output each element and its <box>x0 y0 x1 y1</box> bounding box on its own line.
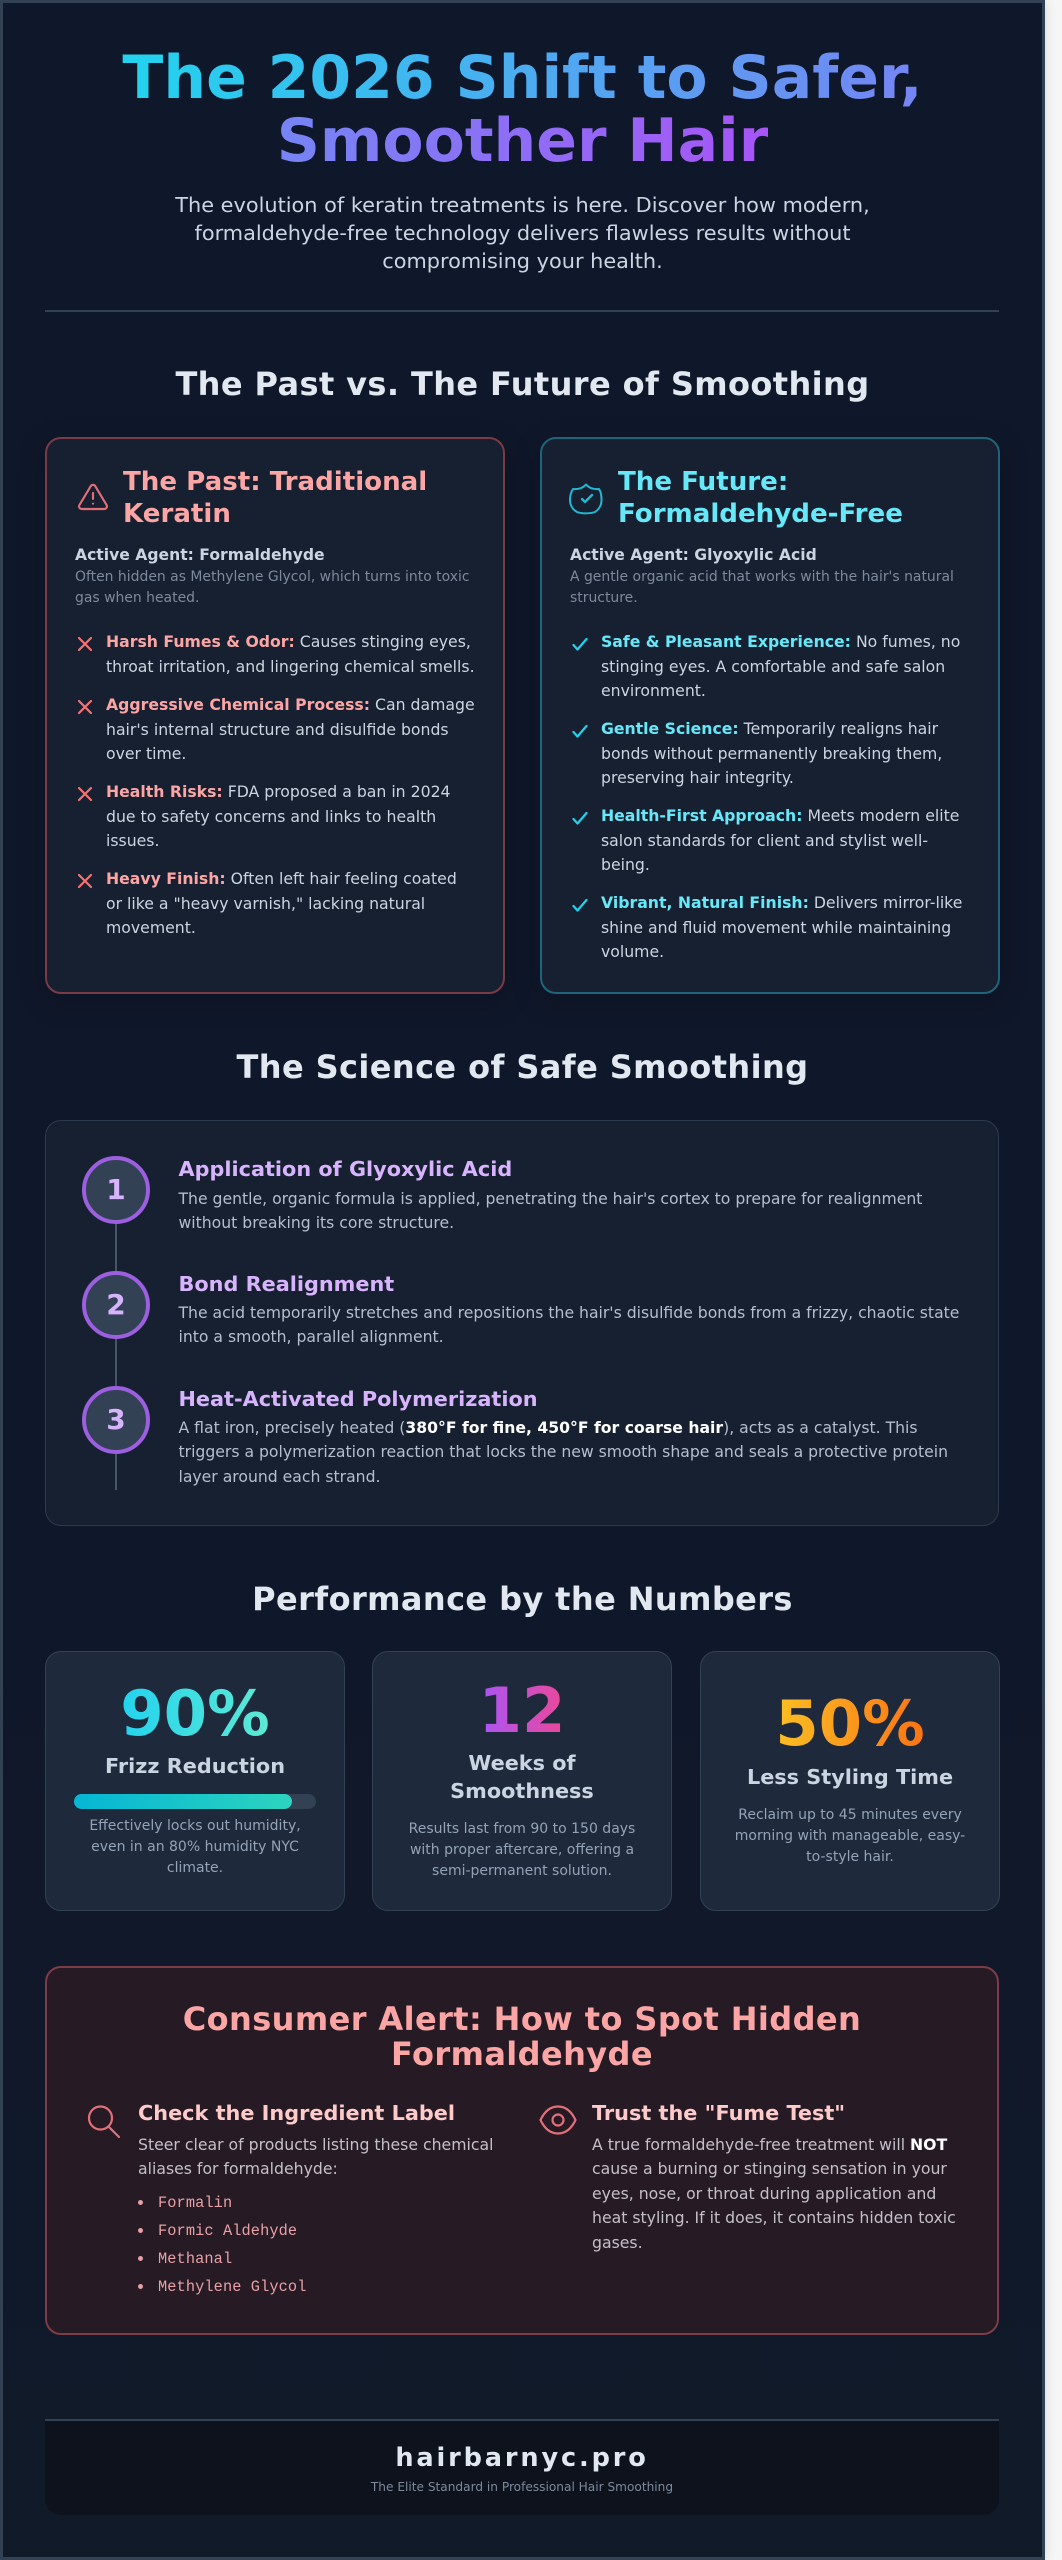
heavy finish item: movement. <box>106 918 196 937</box>
step 2 text: into a smooth, parallel alignment. <box>178 1327 444 1346</box>
heading: performance: Performance by the Numbers <box>252 1580 793 1618</box>
icon: cross 3 <box>78 786 92 802</box>
step 2 text <box>178 1303 959 1346</box>
left check title: Check the Ingredient Label <box>138 2101 455 2125</box>
stat description <box>409 1821 635 1879</box>
title <box>122 43 923 176</box>
stat card: less styling time <box>700 1651 1000 1911</box>
right check text: A true formaldehyde-free treatment will NOT <box>592 2135 947 2154</box>
stat description: Results last from 90 to 150 days <box>409 1821 635 1837</box>
step 3 title: Heat-Activated Polymerization <box>178 1387 538 1411</box>
agent description: gas when heated. <box>75 590 199 606</box>
stat description: to-style hair. <box>806 1849 894 1865</box>
stat value 12: 12 <box>478 1674 565 1747</box>
icon: check 4 <box>572 898 588 912</box>
health risks item: Health Risks: FDA proposed a ban in 2024 <box>106 782 451 801</box>
future heading <box>618 467 903 529</box>
health first item: salon standards for client and stylist well- <box>601 830 928 850</box>
health risks item <box>106 782 451 850</box>
footer <box>45 2419 999 2515</box>
future heading: The Future: <box>618 467 788 497</box>
stat label <box>450 1751 594 1803</box>
heavy finish item <box>106 869 457 937</box>
stat description: morning with manageable, easy- <box>735 1828 965 1844</box>
stat label: Less Styling Time <box>747 1765 953 1789</box>
progress bar <box>74 1794 316 1809</box>
stat description <box>89 1818 301 1876</box>
stat label: Smoothness <box>450 1779 594 1803</box>
health risks item: due to safety concerns and links to health <box>106 806 436 826</box>
harsh fumes item: Harsh Fumes & Odor: Causes stinging eyes, <box>106 632 471 651</box>
left check text: aliases for formaldehyde: <box>138 2159 338 2178</box>
left check text: Steer clear of products listing these chemical <box>138 2135 493 2154</box>
safe experience item: Safe & Pleasant Experience: No fumes, no <box>601 632 960 651</box>
agent description: A gentle organic acid that works with the hair's natural <box>570 569 954 585</box>
stat value 90%: 90% <box>120 1677 270 1750</box>
safe experience item: stinging eyes. A comfortable and safe salon <box>601 656 945 676</box>
past heading <box>123 467 427 529</box>
panel: the past <box>45 437 505 994</box>
harsh fumes item <box>106 632 475 676</box>
icon: shield check <box>569 484 602 514</box>
stat card: frizz reduction <box>45 1651 345 1911</box>
heavy finish item: Heavy Finish: Often left hair feeling coated <box>106 869 457 888</box>
alert heading: Consumer Alert: How to Spot Hidden <box>183 2000 861 2038</box>
agent description <box>570 569 954 606</box>
agent description: structure. <box>570 590 638 606</box>
panel: the future <box>540 437 1000 994</box>
icon: check 2 <box>572 724 588 738</box>
right check text <box>592 2135 956 2252</box>
stat description: Effectively locks out humidity, <box>89 1818 301 1834</box>
future heading: Formaldehyde-Free <box>618 499 903 529</box>
step 2 number: 2 <box>106 1288 126 1321</box>
stat label: Frizz Reduction <box>105 1754 285 1778</box>
aggressive chemical item: Aggressive Chemical Process: Can damage <box>106 695 475 714</box>
step 3 text: triggers a polymerization reaction that locks the new smooth shape and seals a protective protein <box>178 1442 948 1461</box>
stat description: climate. <box>167 1860 223 1876</box>
stat description <box>735 1807 965 1865</box>
subtitle: compromising your health. <box>382 249 663 273</box>
health first item: Health-First Approach: Meets modern elite <box>601 806 959 825</box>
stat label: Weeks of <box>468 1751 576 1775</box>
left check text <box>138 2135 493 2178</box>
alias list: Formalin <box>158 2194 232 2212</box>
subtitle: formaldehyde-free technology delivers flawless results without <box>194 221 850 245</box>
vibrant finish item <box>601 893 962 961</box>
panel: science steps <box>45 1120 999 1526</box>
stat description: Reclaim up to 45 minutes every <box>738 1807 962 1823</box>
step 2 title: Bond Realignment <box>178 1272 394 1296</box>
brand name: hairbarnyc.pro <box>395 2443 649 2473</box>
health risks item: issues. <box>106 831 159 850</box>
aggressive chemical item: over time. <box>106 744 186 763</box>
right check title: Trust the "Fume Test" <box>592 2101 845 2125</box>
title: Smoother Hair <box>277 106 768 176</box>
step 1 title: Application of Glyoxylic Acid <box>178 1157 512 1181</box>
active agent: Active Agent: Formaldehyde <box>75 546 325 564</box>
vibrant finish item: shine and fluid movement while maintaining <box>601 918 951 936</box>
health first item <box>601 806 959 874</box>
right check text: gases. <box>592 2233 643 2252</box>
past heading: Keratin <box>123 499 231 529</box>
gentle science item <box>601 719 942 787</box>
aggressive chemical item: hair's internal structure and disulfide bonds <box>106 720 449 738</box>
gentle science item: preserving hair integrity. <box>601 768 794 787</box>
heading: past vs future: The Past vs. The Future of Smoothing <box>175 365 870 403</box>
step 1 number: 1 <box>106 1173 126 1206</box>
icon: check 1 <box>572 638 588 651</box>
title: The 2026 Shift to Safer, <box>122 43 923 113</box>
gentle science item: bonds without permanently breaking them, <box>601 744 942 762</box>
alert heading <box>183 2000 861 2073</box>
step 2 number <box>82 1271 150 1339</box>
panel: consumer alert <box>45 1966 999 2335</box>
right check text: heat styling. If it does, it contains hidden toxic <box>592 2208 956 2227</box>
stat value 50%: 50% <box>775 1687 925 1760</box>
heavy finish item: or like a "heavy varnish," lacking natural <box>106 894 425 912</box>
step 2 text: The acid temporarily stretches and repositions the hair's disulfide bonds from a frizzy, chaotic state <box>178 1303 959 1322</box>
step 1 text: The gentle, organic formula is applied, penetrating the hair's cortex to prepare for realignment <box>178 1189 922 1208</box>
subtitle <box>175 193 870 273</box>
step 3 number: 3 <box>106 1403 126 1436</box>
aggressive chemical item <box>106 695 475 763</box>
alert heading: Formaldehyde <box>391 2035 653 2073</box>
icon: eye <box>539 2105 577 2135</box>
stat card: weeks of smoothness <box>372 1651 672 1911</box>
step 3 text <box>178 1418 948 1486</box>
agent description: Often hidden as Methylene Glycol, which turns into toxic <box>75 569 470 585</box>
step 3 text: layer around each strand. <box>178 1467 380 1486</box>
icon: magnifier <box>88 2105 120 2138</box>
vibrant finish item: volume. <box>601 942 664 961</box>
gentle science item: Gentle Science: Temporarily realigns hair <box>601 719 938 738</box>
icon: cross 4 <box>78 874 92 888</box>
right check text: cause a burning or stinging sensation in your <box>592 2159 947 2178</box>
stat description: even in an 80% humidity NYC <box>91 1839 299 1855</box>
harsh fumes item: throat irritation, and lingering chemical smells. <box>106 656 475 676</box>
step 1 text: without breaking its core structure. <box>178 1213 454 1232</box>
active agent: Active Agent: Glyoxylic Acid <box>570 546 817 564</box>
alias list <box>138 2194 306 2296</box>
step 1 text <box>178 1189 922 1232</box>
icon: warning triangle <box>78 484 108 510</box>
alias list: Formic Aldehyde <box>158 2222 297 2240</box>
step 3 text: A flat iron, precisely heated (380°F for fine, 450°F for coarse hair), acts as a catalyst. This <box>178 1418 918 1437</box>
step 1 number <box>82 1156 150 1224</box>
icon: cross 1 <box>78 636 92 652</box>
safe experience item: environment. <box>601 681 706 700</box>
agent description <box>75 569 470 606</box>
subtitle: The evolution of keratin treatments is here. Discover how modern, <box>175 193 870 217</box>
heading: science: The Science of Safe Smoothing <box>237 1048 808 1086</box>
icon: check 3 <box>572 812 588 825</box>
health first item: being. <box>601 855 650 874</box>
vibrant finish item: Vibrant, Natural Finish: Delivers mirror-like <box>601 893 962 912</box>
stat description: semi-permanent solution. <box>432 1863 612 1879</box>
safe experience item <box>601 632 960 700</box>
tagline: The Elite Standard in Professional Hair Smoothing <box>371 2480 673 2494</box>
alias list: Methylene Glycol <box>158 2278 306 2296</box>
right check text: eyes, nose, or throat during application and <box>592 2184 936 2203</box>
past heading: The Past: Traditional <box>123 467 427 497</box>
stat description: with proper aftercare, offering a <box>410 1842 634 1858</box>
icon: cross 2 <box>78 700 92 714</box>
step 3 number <box>82 1386 150 1454</box>
alias list: Methanal <box>158 2250 232 2268</box>
